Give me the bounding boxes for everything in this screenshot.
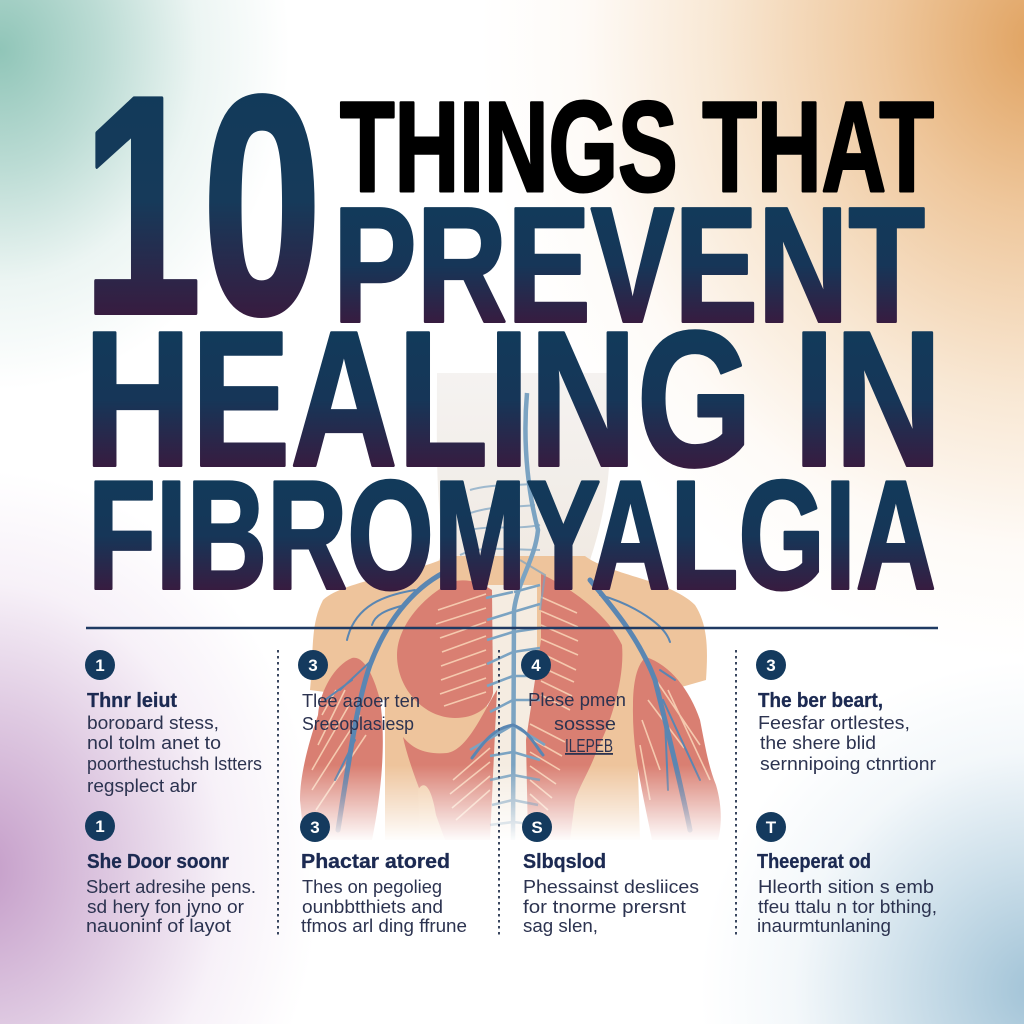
item 1 (85, 650, 262, 796)
item 4 (756, 650, 936, 774)
item 1: Thnr leiut (87, 690, 177, 712)
item 6 (300, 812, 467, 936)
item 4: The ber beart, (758, 690, 883, 712)
item 5: nauoninf of layot (86, 916, 231, 936)
spine (460, 393, 545, 840)
item 5: She Door soonr (87, 851, 229, 873)
item 4: 3 (766, 656, 776, 675)
item 3: Plese pmen (528, 690, 626, 710)
body silhouette (300, 556, 721, 840)
item 3: ILEPEB (565, 736, 613, 756)
nerves (325, 572, 700, 830)
faint head and neck (420, 373, 625, 590)
item 6: ounbbtthiets and (302, 897, 443, 917)
item 8: inaurmtunlaning (757, 916, 891, 936)
item 2: 3 (308, 656, 318, 675)
item 1: poorthestuchsh lstters (87, 754, 262, 774)
item 6: 3 (310, 818, 320, 837)
item 6: Phactar atored (301, 851, 450, 873)
item 5: 1 (95, 817, 105, 836)
illustration: back muscles and nerves (300, 373, 721, 840)
item 4: the shere blid (760, 733, 876, 753)
item 7: sag slen, (523, 916, 598, 936)
item 8: T (766, 818, 777, 837)
item 8: Theeperat od (757, 851, 871, 873)
item 8 (756, 812, 937, 936)
item 5: Sbert adresihe pens. (86, 877, 256, 897)
item 1: boroɒard stess, (87, 713, 219, 733)
item 5: sd hery fon jyno or (87, 897, 244, 917)
item 6: tfmos arl ding ffrune (301, 916, 467, 936)
item 4: Feesfar ortlestes, (758, 713, 910, 733)
item 7: S (531, 818, 543, 837)
item 1: 1 (95, 656, 105, 675)
item 2 (298, 650, 420, 734)
item 8: Hleorth sition s emb (758, 877, 934, 897)
muscle fibres (312, 594, 710, 820)
item 7 (522, 812, 699, 936)
item 4: sernnipoing ctnrtionr (760, 754, 936, 774)
item 7: for tnorme prersnt (523, 897, 686, 917)
item 7: Slbqslod (523, 851, 606, 873)
muscles (300, 574, 721, 840)
item 3: 4 (531, 656, 541, 675)
item 6: Thes on pegolieg (302, 877, 442, 897)
item 2: Sreeoplasiesp (302, 714, 414, 734)
item 8: tfeu ttalu n tor bthing, (758, 897, 937, 917)
item 3 (521, 650, 626, 756)
item 1: nol tolm anet to (87, 733, 221, 753)
item 1: regsplect abr (87, 776, 197, 796)
item 3: sossse (554, 714, 616, 734)
item 7: Phessainst desliices (523, 877, 699, 897)
item 2: Tlee aaoer ten (302, 691, 420, 711)
skin stripes (582, 779, 610, 840)
title (82, 32, 942, 622)
big number 10: 10 (82, 32, 322, 380)
item 5 (85, 811, 256, 936)
